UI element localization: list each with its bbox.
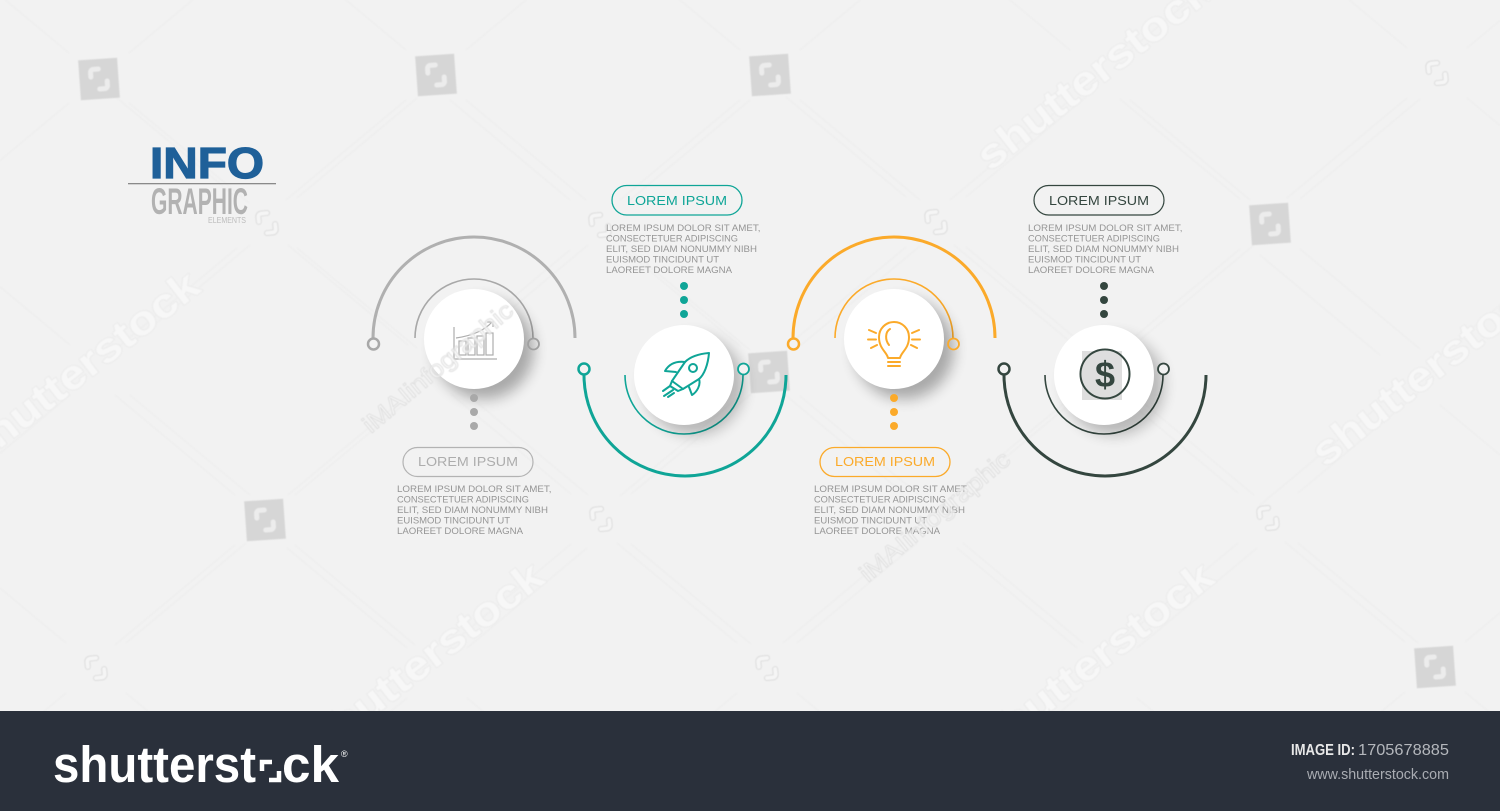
watermark words: shutterstock — [969, 552, 1222, 764]
description text: CONSECTETUER ADIPISCING — [1028, 232, 1160, 244]
description text: LOREM IPSUM DOLOR SIT AMET, — [606, 222, 760, 233]
step 2: teal rocket — [578, 186, 786, 476]
right ring — [948, 338, 959, 350]
icon: rocket — [663, 353, 709, 397]
website url: www.shutterstock.com — [1306, 767, 1449, 783]
left ring — [578, 364, 590, 374]
description text — [814, 483, 968, 536]
author watermark overlay: iMAIinfographic — [855, 446, 1016, 588]
connector dots — [680, 282, 688, 318]
description text: EUISMOD TINCIDUNT UT — [1028, 254, 1141, 264]
connector dots — [1100, 282, 1108, 318]
description text: LOREM IPSUM DOLOR SIT AMET, — [1028, 222, 1182, 233]
description text: LAOREET DOLORE MAGNA — [397, 525, 524, 536]
label pill — [1034, 186, 1164, 215]
icon: dollar coin — [1080, 350, 1130, 400]
description text: LOREM IPSUM DOLOR SIT AMET, — [397, 483, 552, 494]
footer logo: shutterst — [53, 736, 256, 793]
description text: ELIT, SED DIAM NONUMMY NIBH — [397, 504, 548, 515]
connector dots — [470, 394, 478, 430]
description text — [1028, 222, 1182, 275]
left ring — [368, 338, 379, 350]
title: INFO: INFO — [150, 139, 264, 188]
white disc — [1054, 325, 1154, 425]
icon: dollar coin: $ — [1095, 354, 1115, 395]
label pill — [403, 448, 533, 476]
description text: EUISMOD TINCIDUNT UT — [814, 514, 927, 526]
description text: EUISMOD TINCIDUNT UT — [606, 254, 719, 264]
inner arc — [835, 279, 953, 338]
watermark outline logos — [87, 62, 1446, 679]
inner arc — [1045, 375, 1163, 434]
label pill: LOREM IPSUM — [1049, 193, 1149, 208]
subtitle: ELEMENTS: ELEMENTS — [208, 216, 246, 225]
right ring — [528, 338, 539, 350]
icon: bar chart — [454, 322, 497, 359]
disc shadow — [644, 335, 744, 435]
icon: light bulb — [868, 322, 920, 366]
connector dots — [890, 394, 898, 430]
outer arc — [1004, 375, 1206, 476]
inner arc — [415, 279, 533, 338]
title block — [128, 139, 276, 225]
description text: ELIT, SED DIAM NONUMMY NIBH — [606, 243, 757, 254]
description text — [606, 222, 760, 275]
outer arc — [584, 375, 786, 476]
logo o glyph — [262, 762, 279, 780]
description text: EUISMOD TINCIDUNT UT — [397, 514, 510, 526]
outer arc — [373, 237, 575, 338]
description text: CONSECTETUER ADIPISCING — [814, 494, 946, 504]
label pill — [820, 448, 950, 476]
left ring — [788, 338, 799, 350]
white disc — [634, 325, 734, 425]
description text: ELIT, SED DIAM NONUMMY NIBH — [814, 504, 965, 515]
description text: CONSECTETUER ADIPISCING — [606, 232, 738, 244]
description text: LAOREET DOLORE MAGNA — [814, 525, 941, 536]
disc shadow — [434, 299, 534, 399]
step 4: dark dollar — [998, 186, 1206, 476]
step 1: grey chart — [368, 237, 575, 536]
description text — [397, 483, 552, 536]
left ring — [998, 364, 1010, 374]
step 3: orange bulb — [788, 237, 995, 536]
title rule — [128, 183, 276, 184]
inner arc — [625, 375, 743, 434]
watermark logo squares — [78, 54, 1456, 688]
footer logo: ck — [282, 736, 340, 793]
description text: LOREM IPSUM DOLOR SIT AMET, — [814, 483, 968, 494]
subtitle: GRAPHIC: GRAPHIC — [151, 181, 248, 222]
description text: CONSECTETUER ADIPISCING — [397, 494, 529, 504]
description text: LAOREET DOLORE MAGNA — [1028, 264, 1155, 275]
label pill — [612, 186, 742, 215]
author watermark overlay: iMAIinfographic — [358, 297, 519, 439]
image id — [1291, 742, 1449, 759]
outer arc — [793, 237, 995, 338]
disc shadow — [1064, 335, 1164, 435]
image id: 1705678885 — [1358, 742, 1449, 759]
white disc — [424, 289, 524, 389]
right ring — [738, 364, 749, 374]
description text: ELIT, SED DIAM NONUMMY NIBH — [1028, 243, 1179, 254]
disc shadow — [854, 299, 954, 399]
white disc — [844, 289, 944, 389]
label pill: LOREM IPSUM — [835, 454, 935, 469]
registered mark: ® — [341, 749, 348, 759]
right ring — [1158, 364, 1169, 374]
label pill: LOREM IPSUM — [418, 454, 518, 469]
description text: LAOREET DOLORE MAGNA — [606, 264, 733, 275]
image id: IMAGE ID: — [1291, 742, 1355, 759]
watermark words: shutterstock — [299, 552, 552, 764]
label pill: LOREM IPSUM — [627, 193, 727, 208]
